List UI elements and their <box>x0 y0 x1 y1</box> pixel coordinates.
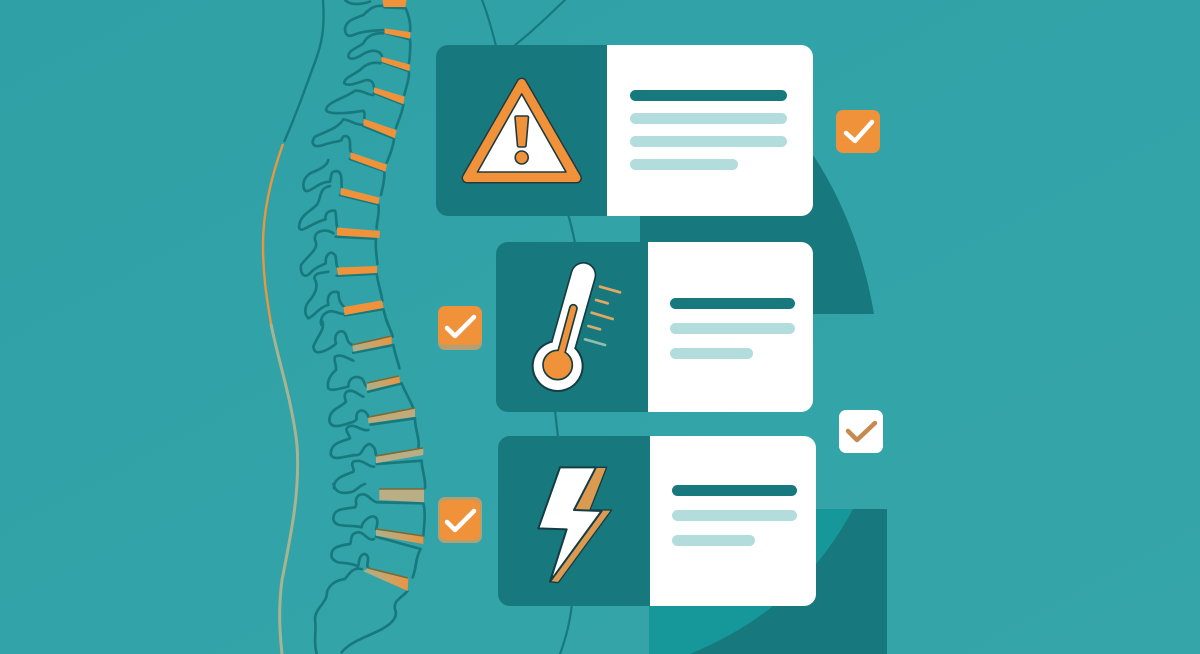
background shape: upper dark wedge <box>640 155 874 314</box>
checkbox: middle left orange <box>438 306 482 350</box>
checkbox: top right orange <box>836 110 880 153</box>
checkbox: white with orange tick <box>839 410 883 453</box>
card 3 white body <box>630 436 816 606</box>
upper spinal cord orange segment <box>263 144 283 330</box>
upper spinal cord line <box>284 0 324 142</box>
lower spinal cord faded segment <box>271 324 298 654</box>
card 1: warning <box>436 45 813 216</box>
card 1 white body <box>590 45 813 216</box>
card 3 text lines <box>672 485 797 546</box>
vertebrae outlines section C <box>313 320 425 488</box>
card 2 text lines <box>670 298 795 359</box>
card 2 icon panel <box>496 242 648 412</box>
card 2: thermometer <box>496 242 813 412</box>
checkbox: lower left orange <box>438 497 482 543</box>
card 3: lightning <box>498 436 816 606</box>
vertebrae outlines section A <box>313 0 410 163</box>
icon: thermometer <box>532 275 620 392</box>
dark edges on lower discs <box>352 336 424 578</box>
icon: lightning bolt <box>538 467 612 583</box>
card 1 icon panel <box>436 45 607 216</box>
background shape: lower dark panel <box>649 509 887 654</box>
spine illustration <box>263 0 425 654</box>
card 2 white body <box>630 242 813 412</box>
lower faded spinal discs <box>352 336 424 591</box>
nerve lines behind cards <box>482 0 575 654</box>
vertebrae outlines section D <box>315 484 425 654</box>
card 1 text lines <box>630 90 787 170</box>
card 3 icon panel <box>498 436 650 606</box>
icon: warning triangle <box>467 83 576 178</box>
vertebrae outlines section B <box>299 159 388 325</box>
upper orange spinal discs <box>338 0 410 314</box>
